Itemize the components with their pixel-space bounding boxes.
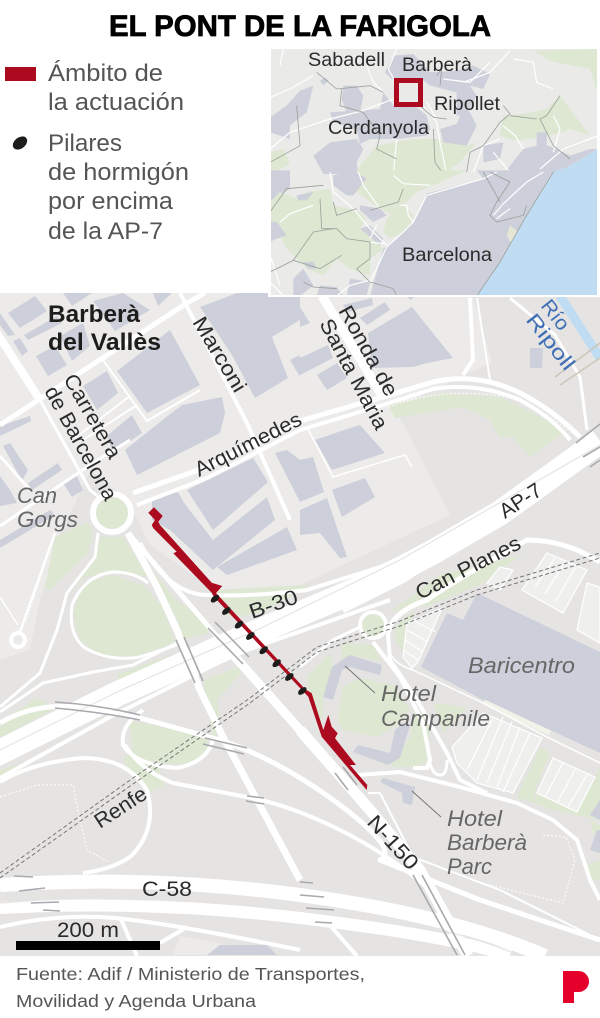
street labels: AP-7 <box>495 479 546 523</box>
legend: work area: Ámbito de <box>48 60 163 87</box>
source <box>16 964 365 1011</box>
street labels: Renfe <box>90 782 151 833</box>
source: Fuente: Adif / Ministerio de Transportes, <box>16 964 365 984</box>
place labels: Hotel <box>381 681 437 706</box>
railway <box>0 553 600 878</box>
map label: Barberà del Vallès: Barberà <box>48 301 141 328</box>
legend: pillars: de hormigón <box>48 159 189 186</box>
place labels: Gorgs <box>17 507 78 532</box>
river label: Ripoll <box>521 310 579 375</box>
inset labels: Barberà <box>402 54 472 76</box>
place labels: Can <box>17 483 57 508</box>
place labels <box>17 483 575 879</box>
source: Movilidad y Agenda Urbana <box>16 991 256 1011</box>
street labels: Ronda de <box>334 302 402 400</box>
river <box>560 296 600 358</box>
place labels: Hotel <box>447 806 503 831</box>
dotted paths <box>0 345 575 903</box>
inset labels: Sabadell <box>308 49 385 71</box>
title: EL PONT DE LA FARIGOLA <box>109 10 491 43</box>
street labels: B-30 <box>246 586 301 624</box>
place labels: Campanile <box>381 706 490 731</box>
inset upper half <box>270 49 598 174</box>
main map <box>0 293 600 956</box>
concrete pillars <box>209 593 308 696</box>
inset labels: Barcelona <box>402 244 492 266</box>
street labels: Carretera <box>59 370 126 463</box>
work area <box>148 507 367 790</box>
map label: Barberà del Vallès: del Vallès <box>48 329 161 356</box>
legend: work area: la actuación <box>48 89 184 116</box>
street labels: Santa Maria <box>315 315 392 434</box>
street labels: Can Planes <box>412 532 525 604</box>
street labels <box>40 302 546 901</box>
street labels: C-58 <box>142 878 192 901</box>
median lines <box>0 445 600 956</box>
map label: Barberà del Vallès <box>48 301 161 356</box>
scale bar <box>16 919 160 950</box>
inset locator square <box>396 80 420 104</box>
river label: Río <box>536 296 574 335</box>
place labels: Parc <box>447 854 492 879</box>
parking lots <box>403 553 600 812</box>
inset labels <box>308 49 501 266</box>
scale bar: 200 m <box>57 919 119 942</box>
legend: pillars <box>10 130 189 245</box>
logo <box>563 971 589 1003</box>
inset labels: Ripollet <box>434 93 501 115</box>
legend: pillars: por encima <box>48 188 174 215</box>
street labels: Marconi <box>188 313 251 397</box>
inset labels: Cerdanyola <box>328 117 429 139</box>
street labels: Arquímedes <box>191 408 306 481</box>
inset lower half <box>270 149 598 296</box>
legend: pillars: de la AP-7 <box>48 218 163 245</box>
legend: work area <box>5 60 184 116</box>
legend: pillars: Pilares <box>48 130 122 157</box>
inset locator map <box>268 47 600 297</box>
buildings <box>0 293 600 853</box>
street labels: N-150 <box>362 811 423 875</box>
roads <box>0 293 600 956</box>
river label <box>521 296 579 375</box>
light lot with building, bottom <box>173 937 277 955</box>
hotel leader lines <box>345 666 441 817</box>
place labels: Baricentro <box>468 653 575 678</box>
bridges <box>14 424 600 955</box>
street labels: de Barcelona <box>40 382 121 505</box>
green areas <box>0 393 600 880</box>
roundabouts <box>93 494 131 532</box>
place labels: Barberà <box>447 830 527 855</box>
